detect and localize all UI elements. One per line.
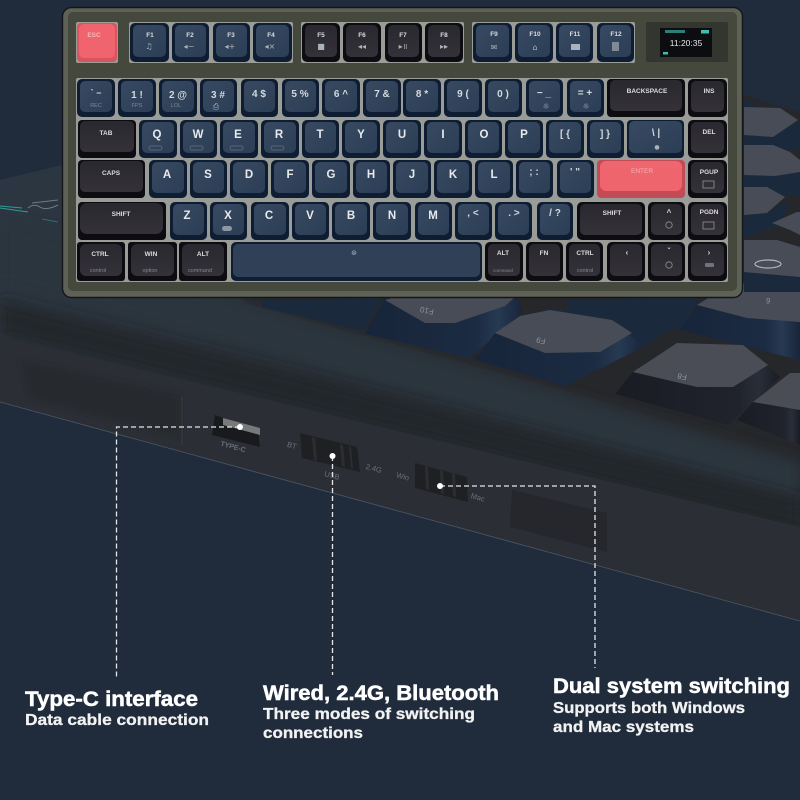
QWERTY row: O [480, 129, 489, 141]
bottom row: command [493, 268, 513, 273]
QWERTY row: I [441, 129, 445, 141]
number row: 4 $ [252, 89, 266, 100]
ZXCV row: SHIFT [603, 210, 621, 217]
caption: dual system [553, 675, 790, 736]
ASDF row: G [327, 169, 336, 181]
function row: F4 [267, 32, 275, 39]
function row: F1 [146, 32, 154, 39]
switch: connection mode: BT [286, 440, 298, 451]
function row: F10 [529, 31, 541, 38]
function row: ESC [87, 32, 101, 39]
ASDF row: A [163, 169, 171, 181]
bottom row: command [188, 268, 212, 274]
bottom row: CTRL [91, 251, 109, 258]
number row [77, 79, 727, 117]
QWERTY row: R [275, 129, 284, 141]
QWERTY row: DEL [702, 129, 716, 136]
ZXCV row: C [265, 210, 273, 222]
function row: ◂− [184, 42, 194, 51]
ZXCV row: PGDN [700, 209, 719, 216]
QWERTY row: [ { [560, 129, 570, 140]
keycaps behind keyboard: F10 [419, 305, 435, 316]
LCD screen [646, 22, 728, 62]
port: Type-C: TYPE-C [220, 441, 246, 454]
leader line: connection modes [330, 453, 336, 675]
caption: dual system: and Mac systems [553, 719, 694, 736]
function row: F11 [570, 31, 581, 38]
function row: ◂◂ [358, 42, 366, 51]
function row: ◂+ [225, 42, 235, 51]
QWERTY row: U [398, 129, 406, 141]
QWERTY row: Y [357, 129, 365, 141]
number row: 9 ( [457, 89, 470, 100]
keycaps behind keyboard: F8 [676, 371, 688, 382]
QWERTY row: P [520, 129, 528, 141]
ASDF row [78, 160, 727, 198]
ZXCV row: ^ [667, 208, 672, 217]
keycaps behind keyboard: F9 [535, 335, 546, 346]
number row: ☼ [582, 102, 590, 111]
function row [77, 23, 634, 62]
function row: F9 [490, 31, 498, 38]
number row: ☼ [542, 102, 550, 111]
switch: connection mode: USB [323, 469, 340, 482]
port: Type-C [212, 415, 260, 454]
number row: = + [578, 88, 592, 99]
function row: F12 [610, 31, 622, 38]
caption: connection modes: connections [263, 725, 363, 742]
number row: 7 & [374, 89, 390, 100]
function row: ✉ [491, 43, 497, 52]
function row: ▸▸ [440, 42, 448, 51]
switch: connection mode: 2.4G [365, 462, 383, 475]
function row: ♫ [145, 42, 153, 51]
bottom row: ALT [497, 250, 509, 257]
caption: dual system: Supports both Windows [553, 700, 745, 717]
bottom row: control [577, 268, 593, 274]
frame [62, 8, 742, 298]
bottom row: ALT [197, 251, 209, 258]
bottom row: › [708, 248, 711, 257]
ASDF row: ' " [570, 167, 580, 178]
caption: Type-C interface: Data cable connection [25, 712, 209, 729]
bottom row: WIN [145, 251, 158, 258]
number row: 1 ! [131, 90, 143, 101]
bottom row: CTRL [576, 250, 594, 257]
switch: operating system: Win [395, 470, 410, 483]
function row: ◂× [265, 42, 275, 51]
ASDF row: ; : [529, 167, 539, 178]
number row: INS [704, 88, 715, 95]
function row: ■ [317, 42, 325, 51]
leader line: system switch [437, 483, 595, 668]
number row: REC [90, 103, 102, 109]
QWERTY row: ] } [600, 129, 610, 140]
QWERTY row: Q [153, 129, 162, 141]
QWERTY row: W [193, 129, 204, 141]
function row: F2 [186, 32, 194, 39]
QWERTY row: TAB [100, 130, 113, 137]
function row: F7 [399, 32, 407, 39]
QWERTY row: ● [654, 144, 660, 151]
QWERTY row: T [316, 129, 324, 141]
caption: Type-C interface [25, 688, 209, 729]
caption: connection modes: Three modes of switching [263, 706, 475, 723]
ZXCV row: N [388, 210, 396, 222]
ASDF row: S [204, 169, 212, 181]
bottom row: ⊛ [351, 249, 357, 257]
caption: connection modes: Wired, 2.4G, Bluetooth [263, 682, 499, 705]
switch: connection mode [286, 433, 383, 482]
bottom row: option [142, 268, 158, 274]
function row: F6 [358, 32, 366, 39]
number row: 8 * [416, 89, 428, 100]
number row: FPS [132, 103, 143, 109]
number row: 2 @ [169, 90, 187, 101]
keyboard body photo [0, 95, 800, 621]
keycaps behind keyboard: 6 [765, 296, 771, 305]
number row: ⎙ [213, 102, 220, 111]
leader line: Type-C [116, 424, 243, 678]
bottom row: control [90, 268, 106, 274]
caption: dual system: Dual system switching [553, 675, 790, 698]
ZXCV row: SHIFT [112, 211, 130, 218]
ZXCV row: X [224, 210, 232, 222]
ASDF row: ENTER [631, 168, 653, 175]
ASDF row: H [367, 169, 375, 181]
keycaps behind keyboard [262, 100, 800, 445]
bottom row: ˇ [668, 247, 671, 256]
ASDF row: L [490, 169, 498, 181]
QWERTY row: \ | [652, 128, 660, 139]
number row: ` − [91, 88, 101, 98]
ASDF row: PGUP [700, 169, 719, 176]
ZXCV row: . > [508, 208, 520, 219]
ZXCV row: Z [183, 210, 191, 222]
ZXCV row: V [306, 210, 314, 222]
function row: ▸॥ [399, 42, 407, 51]
QWERTY row: E [234, 129, 242, 141]
inner bezel [68, 12, 737, 291]
blank slot on chassis [510, 490, 607, 552]
bottom row: ‹ [626, 248, 629, 257]
switch: operating system: Mac [470, 491, 486, 504]
function row: ⌂ [532, 43, 538, 52]
bottom row [77, 242, 727, 281]
number row: 0 ) [497, 89, 509, 100]
number row: 5 % [291, 89, 309, 100]
ZXCV row: , < [467, 208, 479, 219]
function row: F8 [440, 32, 448, 39]
ZXCV row: B [347, 210, 355, 222]
number row: − _ [537, 88, 552, 99]
ZXCV row: M [428, 210, 438, 222]
number row: 3 # [211, 90, 225, 101]
QWERTY row [78, 120, 727, 158]
number row: LOL [171, 103, 181, 109]
caption: connection modes [263, 682, 499, 742]
ASDF row: D [245, 169, 253, 181]
ZXCV row: / ? [549, 208, 561, 219]
ASDF row: CAPS [102, 170, 121, 177]
ASDF row: K [449, 169, 458, 181]
ASDF row: J [409, 169, 415, 181]
plates [76, 22, 728, 282]
caption: Type-C interface: Type-C interface [25, 688, 198, 711]
ASDF row: F [286, 169, 294, 181]
keyboard layout diagram [62, 8, 742, 298]
function row: F5 [317, 32, 325, 39]
number row: 6 ^ [334, 89, 348, 100]
switch: operating system [395, 463, 486, 504]
LCD screen: 11:20:35 [670, 38, 702, 48]
ZXCV row [78, 202, 727, 240]
bottom row: FN [540, 250, 549, 257]
number row: BACKSPACE [627, 88, 668, 95]
function row: F3 [227, 32, 235, 39]
